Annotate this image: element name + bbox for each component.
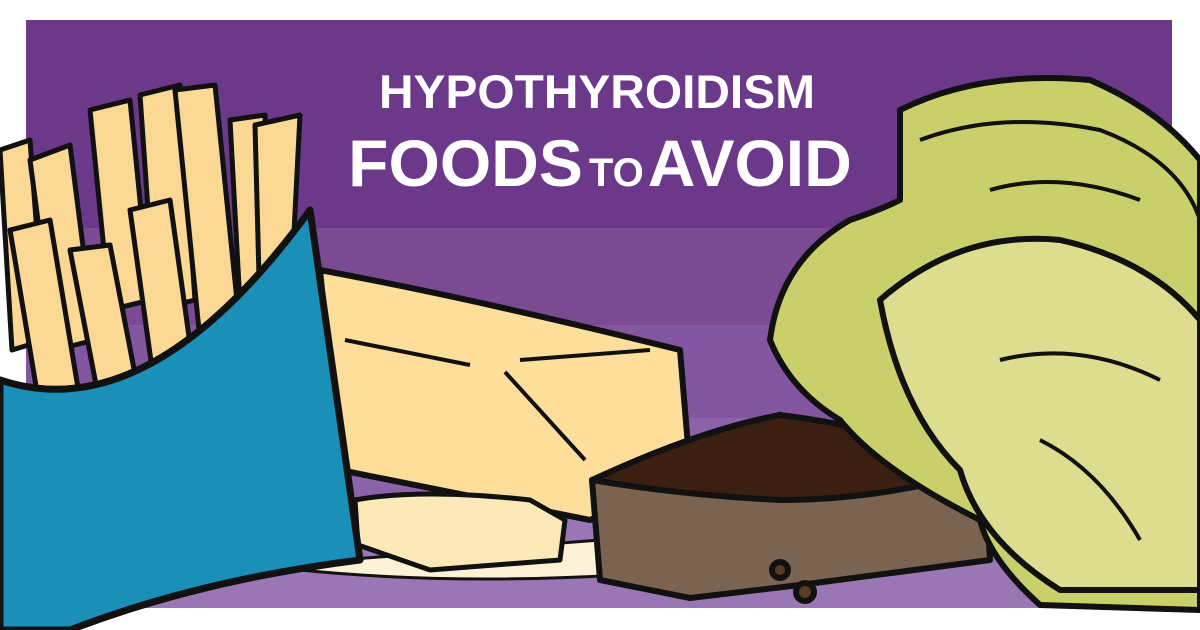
title: FOODSTOAVOID <box>348 126 852 200</box>
fries <box>0 85 300 410</box>
cabbage <box>770 78 1200 610</box>
fries container <box>0 210 360 630</box>
cheese block <box>320 270 690 520</box>
title: HYPOTHYROIDISM <box>379 65 815 118</box>
brownie <box>592 415 990 601</box>
butter pat <box>300 494 620 579</box>
title <box>348 65 852 200</box>
